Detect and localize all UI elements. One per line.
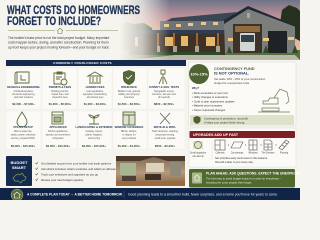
card: utility setup: service, propane/HVAC <box>11 137 35 140</box>
card: utility setup: $5,000 – $15,000+ <box>11 144 35 148</box>
card: insurance: INSURANCE <box>121 85 137 89</box>
title <box>7 3 140 28</box>
budget checklist: Track your selections and upgrades as you go <box>41 172 99 176</box>
card: lender fees: appraisal, underwriting, <box>83 93 107 96</box>
section header: commonly overlooked costs <box>6 60 186 66</box>
contingency heading: IS NOT OPTIONAL. <box>214 70 249 76</box>
budget checklist: Ask what's included, what's excluded, and what's an allowance <box>41 167 119 171</box>
upgrade icons row: Flooring <box>280 152 289 154</box>
card: appliances: Kitchen appliances, <box>48 130 68 133</box>
panel: contingency fund <box>188 62 296 126</box>
intro text: costs happen before, during, and after construction. Planning for them <box>8 41 109 45</box>
card: appliances: laundry, and sometimes <box>46 134 71 136</box>
card: landscaping and exterior <box>76 111 112 149</box>
panel: budget smart <box>6 156 32 186</box>
card: window coverings: WINDOW COVERINGS <box>115 125 144 129</box>
reasons list: • Code or plan requirement updates <box>192 99 235 103</box>
reasons list: Why? <box>192 86 200 90</box>
card: survey and soil tests: SURVEY & SOIL TESTS <box>149 85 179 89</box>
intro text: up front keeps your project moving forward—and your budget on track. <box>8 45 110 49</box>
icon: home badge <box>192 172 202 184</box>
contingency note: It helps your project finish strong. <box>204 120 245 124</box>
panel: upgrades add up fast <box>189 128 296 167</box>
title: FORGET TO INCLUDE? <box>7 14 101 28</box>
callout: plan ahead <box>189 169 303 188</box>
card: window coverings <box>113 111 147 149</box>
contingency percentage badge: 10%-15% <box>190 72 208 76</box>
card: insurance: insurance <box>124 96 135 99</box>
budget checklist: Review your total budget regularly <box>41 178 84 182</box>
upgrades header: UPGRADES ADD UP FAST <box>193 133 239 137</box>
card: landscaping and exterior: plants, irrigation, <box>85 134 103 136</box>
reasons list: • Utility changes or extensions <box>192 95 229 99</box>
panel: budget smart: SMART <box>12 165 27 170</box>
card: lender fees: LENDER FEES <box>86 85 105 89</box>
card: lender fees: $1,000 – $3,000+ <box>84 102 107 106</box>
icon: excavator <box>258 89 290 112</box>
card: design and engineering: structural engineering, <box>12 93 35 96</box>
footer slogan: A COMPLETE PLAN TODAY → A BETTER HOME TOMORROW <box>27 192 122 197</box>
card: survey and soil tests <box>148 68 185 109</box>
contingency note <box>190 115 294 125</box>
card: permits and fees: inspection fees <box>52 96 69 99</box>
interior photo <box>116 156 185 186</box>
reasons list: • Owner requested changes <box>192 108 226 112</box>
card: permits and fees: Building permits, <box>51 90 69 93</box>
card: window coverings: Blinds, shades, <box>121 131 137 133</box>
upgrade icons row: Cabinets <box>215 152 225 154</box>
card: landscaping and exterior: Grading, topsoil, <box>86 130 103 133</box>
title divider with house icon <box>8 28 118 34</box>
card: utility setup <box>6 111 41 149</box>
contingency description <box>214 77 266 85</box>
card: utility setup: UTILITY SETUP <box>13 125 33 129</box>
card: permits and fees: impact fees, and <box>51 93 69 96</box>
budget checklist <box>36 161 119 182</box>
contingency description: budget for unexpected costs <box>214 81 250 85</box>
reasons list: • Material price increases <box>192 104 223 108</box>
icon: coin stack: Small upgrades <box>190 152 207 154</box>
card: design and engineering: DESIGN & ENGINEERING <box>7 85 40 89</box>
reasons list <box>192 86 235 112</box>
card: design and engineering <box>6 68 41 109</box>
card: lender fees: Loan application, <box>86 90 104 93</box>
card: insurance: Builder's risk, general <box>118 90 141 93</box>
card: design and engineering: and plan revisions <box>14 96 34 99</box>
section header: commonly overlooked costs: COMMONLY OVERLOOKED COSTS <box>53 61 112 65</box>
icon: coin stack <box>190 141 207 158</box>
card: move-in and misc <box>148 111 185 149</box>
upgrades advice text <box>215 156 268 164</box>
card: move-in and misc: Trash dumpster, cleaning, <box>152 130 179 133</box>
card: landscaping and exterior: LANDSCAPING & EXTERIOR <box>76 125 112 129</box>
card: design and engineering: $2,000 – $7,000+ <box>12 102 35 106</box>
contingency heading <box>214 66 255 76</box>
footer message: Good planning leads to a smoother build, fewer surprises, and a home you'll love for years to come. <box>128 192 278 196</box>
card: window coverings: every window <box>122 137 136 140</box>
upgrade icons row: Windows <box>248 152 259 154</box>
card: move-in and misc: small tools, supplies <box>155 137 176 140</box>
contingency note: Contingency is protection, not profit. <box>204 116 249 120</box>
card: permits and fees <box>42 68 77 109</box>
card: move-in and misc: $500 – $2,000+ <box>155 144 175 148</box>
card: survey and soil tests: Topographic survey, <box>154 90 175 93</box>
card: move-in and misc: temporary fencing, <box>155 134 175 136</box>
card: window coverings: $1,000 – $4,000+ <box>118 144 141 148</box>
reasons list: • Rock excavation or poor soil <box>192 91 228 95</box>
icon: coin stack: can add up <box>192 156 204 158</box>
card: lender fees: and closing fees <box>87 97 104 99</box>
card: survey and soil tests: (if required) <box>158 96 170 99</box>
card: appliances <box>42 111 77 149</box>
callout: plan ahead: The best way to avoid budget impact is to plan for everything— <box>206 176 281 180</box>
card: appliances: APPLIANCES <box>49 125 67 129</box>
callout: plan ahead: including the costs people often forget. <box>206 180 252 184</box>
upgrade icons row: Tile Showers <box>261 152 275 154</box>
footer logo <box>11 189 23 201</box>
card: lender fees <box>78 68 112 109</box>
upgrades advice text: Set priorities early and invest in the features <box>215 156 268 160</box>
card: permits and fees: PERMITS & FEES <box>49 85 71 89</box>
card: landscaping and exterior: $3,000 – $15,000+ <box>82 144 106 148</box>
upgrades advice text: that will matter to you every day. <box>215 160 254 164</box>
card: survey and soil tests: soil tests, and perc test <box>152 93 176 96</box>
title: WHAT COSTS DO HOMEOWNERS <box>7 3 140 17</box>
footer band <box>0 188 300 201</box>
card: survey and soil tests: $800 – $2,500+ <box>154 102 174 106</box>
card: permits and fees: $1,000 – $5,000+ <box>49 102 72 106</box>
card: insurance <box>113 68 147 109</box>
upgrade icons row: Countertops <box>231 152 244 154</box>
card: appliances: $3,000 – $10,000+ <box>46 144 70 148</box>
panel: budget smart: BUDGET <box>11 160 28 165</box>
hero photo: barndominium house at sunset <box>120 0 300 60</box>
card: utility setup: Well or water tap, <box>14 130 32 133</box>
panel: cost cards <box>6 68 185 149</box>
intro text <box>8 36 110 49</box>
card: utility setup: septic system, electrical <box>11 134 36 136</box>
card: insurance: $1,500 – $3,500+ <box>118 102 141 106</box>
card: insurance: liability, and property <box>118 93 140 96</box>
contingency description: Set aside 10% - 15% of your construction <box>214 77 266 81</box>
upgrade icons row <box>215 140 289 154</box>
card: move-in and misc: MOVE-IN & MISC. <box>154 125 176 129</box>
card: window coverings: or drapes for <box>122 134 136 136</box>
budget checklist: Get detailed scopes from your builder and trade partners <box>41 161 112 165</box>
card: appliances: refrigerator <box>52 137 64 140</box>
intro text: The builder's base price is not the total project budget. Many important <box>8 36 109 40</box>
contingency heading: CONTINGENCY FUND <box>214 66 255 71</box>
card: landscaping and exterior: and fencing <box>88 138 101 140</box>
card: design and engineering: Architectural plans, <box>14 90 34 93</box>
